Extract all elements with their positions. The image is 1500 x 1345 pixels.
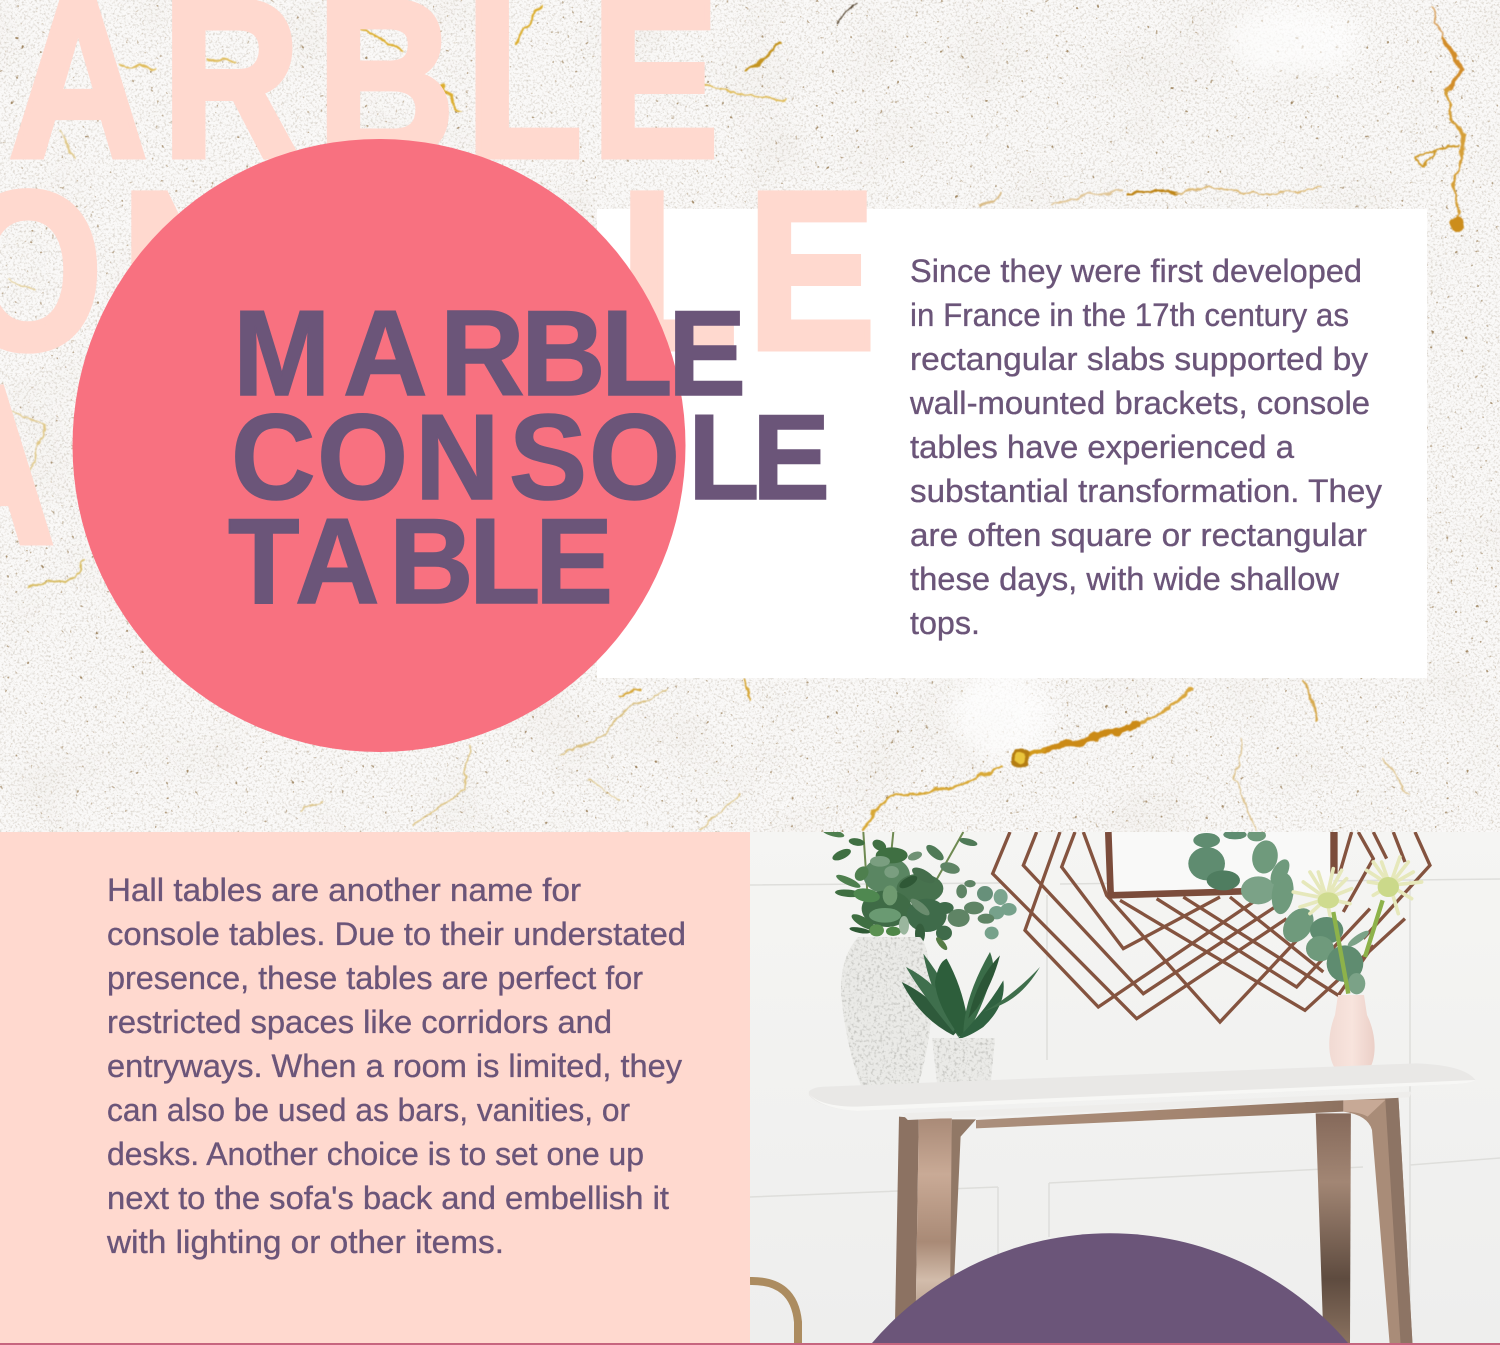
text block: hall tables paragraph: restricted spaces like corridors and	[107, 1004, 612, 1040]
marble background	[0, 0, 1500, 832]
text block: hall tables paragraph: console tables. Due to their understated	[107, 916, 686, 952]
title: TABLE	[228, 494, 613, 630]
icon: agapanthus flowers	[1293, 857, 1422, 994]
icon: white textured vase	[841, 937, 931, 1090]
icon: geometric wall mirror	[993, 832, 1430, 1022]
text block: hall tables paragraph: presence, these tables are perfect for	[107, 960, 643, 996]
text block: intro paragraph	[909, 253, 1382, 641]
text block: intro paragraph: rectangular slabs supported by	[910, 341, 1368, 377]
icon: marble table	[809, 1063, 1475, 1343]
text block: intro paragraph: tops.	[910, 605, 980, 641]
text block: hall tables paragraph: with lighting or other items.	[106, 1224, 504, 1260]
icon: agave in white pot	[902, 952, 1040, 1096]
icon: left plant	[822, 827, 1017, 952]
text block: intro paragraph: wall-mounted brackets, console	[909, 385, 1370, 421]
text block: intro paragraph: Since they were first developed	[910, 253, 1362, 289]
text block: hall tables paragraph: entryways. When a room is limited, they	[107, 1048, 682, 1084]
watermark title text	[0, 0, 875, 590]
text block: intro paragraph: substantial transformation. They	[910, 473, 1382, 509]
icon: eucalyptus sprig on mirror	[1188, 829, 1371, 994]
text block: intro paragraph: tables have experienced a	[910, 429, 1294, 465]
text block: intro paragraph: in France in the 17th century as	[910, 297, 1349, 333]
title: MARBLE	[233, 286, 746, 422]
panel: peach text panel	[0, 832, 750, 1343]
bottom rule	[0, 1343, 1500, 1345]
title: CONSOLE	[231, 390, 830, 526]
text block: hall tables paragraph: next to the sofa's back and embellish it	[107, 1180, 669, 1216]
icon: chair arm	[750, 1281, 798, 1343]
text block: hall tables paragraph: desks. Another choice is to set one up	[107, 1136, 644, 1172]
text block: hall tables paragraph: can also be used as bars, vanities, or	[107, 1092, 630, 1128]
text block: intro paragraph: are often square or rectangular	[910, 517, 1367, 553]
text block: intro paragraph: these days, with wide shallow	[910, 561, 1340, 597]
icon: pink vase	[1329, 995, 1375, 1073]
panel: white intro panel	[597, 209, 1427, 678]
title	[228, 286, 830, 630]
text block: hall tables paragraph	[106, 872, 686, 1260]
photo: console table in a white room	[750, 827, 1500, 1343]
text block: hall tables paragraph: Hall tables are another name for	[107, 872, 581, 908]
purple circle	[872, 1233, 1348, 1343]
coral circle	[72, 139, 686, 752]
